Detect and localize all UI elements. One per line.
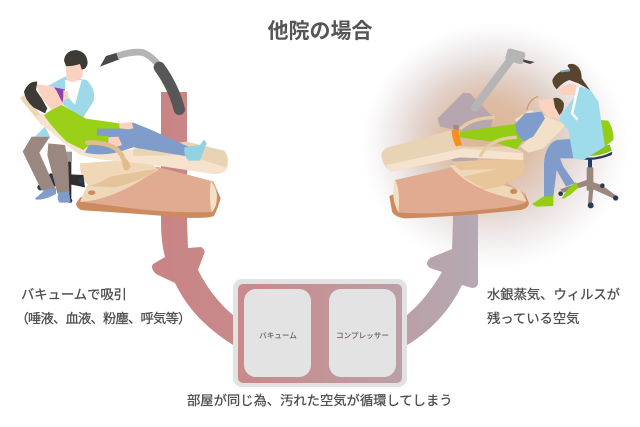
title: 他院の場合 (268, 20, 372, 43)
text: vacuum suction note: （唾液、血液、粉塵、呼気等） (16, 310, 190, 326)
illustration: left dental chair with dentist and patient (20, 50, 228, 218)
text: remaining mercury vapor note (487, 287, 620, 326)
text: remaining mercury vapor note: 水銀蒸気、ウィルスが (487, 287, 620, 302)
text: bottom caption: 部屋が同じ為、汚れた空気が循環してしまう (187, 393, 453, 408)
text: remaining mercury vapor note: 残っている空気 (487, 311, 579, 326)
chair base (76, 158, 221, 218)
text: vacuum suction note: バキュームで吸引 (21, 287, 127, 302)
chair seat and backrest (20, 95, 228, 174)
text: vacuum suction note (16, 287, 190, 326)
panel: vacuum: バキューム (259, 331, 297, 340)
back plate and instrument arm (438, 48, 535, 137)
patient (452, 97, 564, 149)
arm rest (87, 143, 127, 167)
vacuum hose (100, 52, 179, 109)
arrow: vacuum air flowing into the machine box (152, 92, 238, 348)
stool (558, 120, 618, 208)
background contamination glow (361, 22, 629, 270)
patient legs (85, 123, 207, 161)
panel: compressor (329, 289, 396, 377)
machine box (233, 279, 407, 387)
chair base (389, 158, 529, 218)
dentist upper body (35, 50, 94, 137)
patient torso and head (24, 82, 133, 150)
dentist (532, 64, 605, 207)
panel: compressor: コンプレッサー (336, 331, 389, 340)
arm rest (460, 117, 517, 157)
illustration: right dental chair with dentist and patient (381, 48, 618, 218)
panel: vacuum (244, 289, 311, 377)
dentist stool and legs (23, 137, 85, 203)
arrow: dirty air flowing back to the chair (402, 150, 478, 348)
chair seat and headrest (381, 110, 566, 172)
